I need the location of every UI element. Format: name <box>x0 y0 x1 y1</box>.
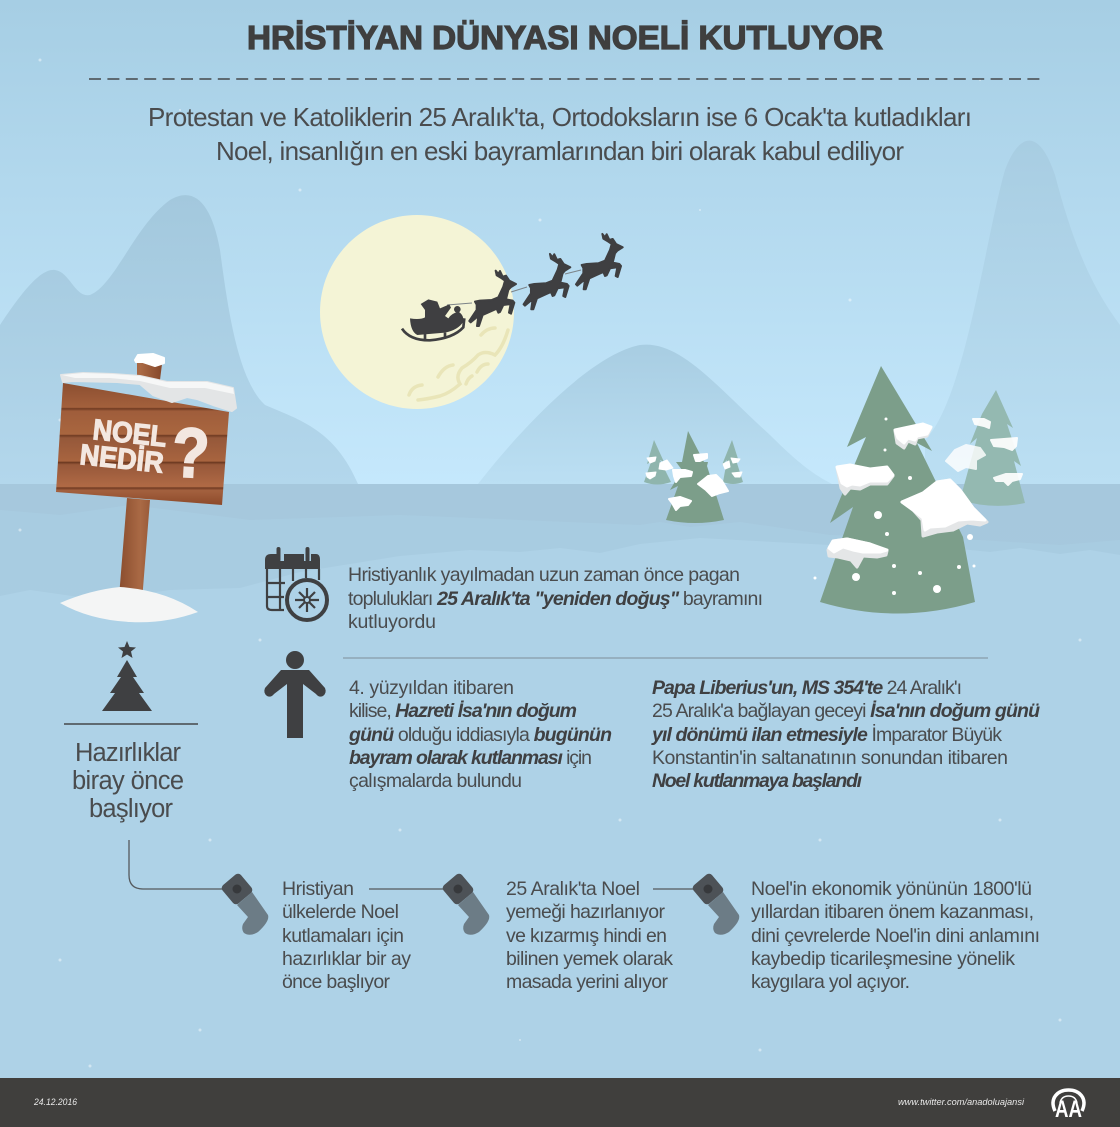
board label: NOEL <box>91 414 168 454</box>
question mark: ? <box>170 413 211 493</box>
text: pagan communities: toplulukları 25 Aralık'ta "yeniden doğuş" bayramını <box>348 588 763 610</box>
text: fourth century: kilise, Hazreti İsa'nın doğum <box>349 699 577 722</box>
icon: calendar with snowflake <box>265 547 327 620</box>
rule under tree <box>64 723 198 725</box>
signpost: Noel nedir <box>56 354 236 622</box>
text: step 2: 25 Aralık'ta Noel <box>506 878 640 900</box>
sleigh with Santa <box>402 299 464 340</box>
icon: tree with star <box>102 641 152 711</box>
text: pagan communities: Hristiyanlık yayılmadan uzun zaman önce pagan <box>348 564 740 586</box>
text: pagan communities: kutluyordu <box>348 611 436 633</box>
moon <box>320 215 514 409</box>
icon: stocking 1 <box>220 872 268 935</box>
text: Papa Liberius: 25 Aralık'a bağlayan geceyi İsa'nın doğum günü <box>652 699 1040 722</box>
heading: preparations: Hazırlıklar <box>75 739 182 767</box>
tree: right, translucent <box>946 390 1025 506</box>
tree: large foreground <box>814 366 987 614</box>
text: step 2: bilinen yemek olarak <box>506 948 673 970</box>
text: step 1: ülkelerde Noel <box>282 901 399 923</box>
text: step 1: hazırlıklar bir ay <box>282 948 411 970</box>
text: step 3: kaygılara yol açıyor. <box>751 971 910 993</box>
subtitle: Noel, insanlığın en eski bayramlarından biri olarak kabul ediliyor <box>216 136 904 166</box>
connector line <box>129 840 696 889</box>
snow dots <box>814 418 976 595</box>
reins <box>447 270 581 305</box>
snow band: lower <box>0 538 1120 1078</box>
mountain: right <box>925 141 1120 484</box>
trees: small group <box>644 431 743 523</box>
text: fourth century: çalışmalarda bulundu <box>349 770 522 792</box>
post snow cap <box>135 354 164 366</box>
snow mound <box>60 587 198 622</box>
text: fourth century <box>348 677 612 792</box>
snow clumps <box>895 425 931 448</box>
text: Papa Liberius <box>651 677 1040 792</box>
text: step 2: ve kızarmış hindi en <box>506 925 667 947</box>
heading: preparations: başlıyor <box>89 795 174 823</box>
logo: Anadolu Agency <box>1053 1090 1084 1123</box>
heading: preparations <box>72 739 184 823</box>
subtitle: Protestan ve Katoliklerin 25 Aralık'ta, Ortodoksların ise 6 Ocak'ta kutladıkları <box>148 102 972 132</box>
text: Papa Liberius: Konstantin'in saltanatının sonundan itibaren <box>652 747 1008 769</box>
tree: far right <box>722 440 743 484</box>
mountain: left <box>0 195 358 484</box>
logo: Anadolu Agency: AA <box>1055 1096 1082 1123</box>
tree: centre <box>666 431 728 523</box>
text: step 3 <box>751 878 1040 993</box>
sky background <box>0 0 1120 485</box>
board snow <box>61 373 236 411</box>
tree: far left <box>644 440 673 484</box>
text: step 1 <box>282 878 411 993</box>
reindeer 1 <box>469 271 516 326</box>
text: pagan communities <box>348 564 763 633</box>
text: step 1: önce başlıyor <box>282 971 390 993</box>
text: step 2 <box>506 878 673 993</box>
text: step 1: kutlamaları için <box>282 925 404 947</box>
subtitle <box>148 102 972 166</box>
wooden board <box>56 383 229 505</box>
divider <box>343 657 988 659</box>
twitter address: www.twitter.com/anadoluajansi <box>898 1097 1025 1108</box>
mountain: centre <box>478 345 832 484</box>
text: step 3: dini çevrelerde Noel'in dini anlamını <box>751 925 1040 947</box>
reindeer 2 <box>524 254 570 309</box>
dashed divider <box>89 78 1042 80</box>
icon: person <box>264 651 326 738</box>
heading: preparations: biray önce <box>72 767 184 795</box>
text: step 3: Noel'in ekonomik yönünün 1800'lü <box>751 878 1032 900</box>
text: Papa Liberius: yıl dönümü ilan etmesiyle İmparator Büyük <box>651 723 1002 746</box>
icon: stocking 2 <box>441 872 489 935</box>
post <box>119 362 162 601</box>
title: HRİSTİYAN DÜNYASI NOELİ KUTLUYOR <box>247 20 883 57</box>
reindeer 3 <box>576 234 623 289</box>
text: step 3: kaybedip ticarileşmesine yönelik <box>751 948 1015 970</box>
text: Papa Liberius: Papa Liberius'un, MS 354'te 24 Aralık'ı <box>652 677 962 699</box>
snow band: upper <box>0 505 1120 1078</box>
text: fourth century: bayram olarak kutlanması için <box>349 747 592 769</box>
moon clouds <box>409 328 508 400</box>
text: step 2: yemeği hazırlanıyor <box>506 901 666 923</box>
text: step 2: masada yerini alıyor <box>506 971 668 993</box>
text: step 1: Hristiyan <box>282 878 354 900</box>
text: Papa Liberius: Noel kutlanmaya başlandı <box>652 770 863 792</box>
text: step 3: yıllardan itibaren önem kazanması, <box>751 901 1034 923</box>
text: fourth century: 4. yüzyıldan itibaren <box>349 677 514 699</box>
date: 24.12.2016 <box>33 1097 77 1107</box>
footer bar <box>0 1078 1120 1127</box>
text: fourth century: günü olduğu iddiasıyla bugünün <box>348 724 612 746</box>
ground <box>0 484 1120 1078</box>
icon: stocking 3 <box>691 872 739 935</box>
sleigh and reindeer <box>402 234 623 340</box>
board label second line: NEDİR <box>78 439 165 480</box>
